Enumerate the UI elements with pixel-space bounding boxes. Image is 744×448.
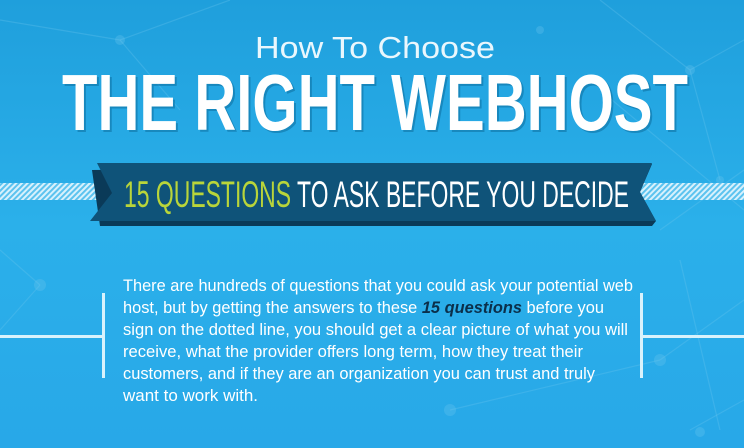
bracket lines (0, 293, 744, 378)
hatched stripes (0, 183, 744, 200)
banner ribbon (90, 163, 656, 226)
intro paragraph: want to work with. (122, 386, 258, 405)
intro paragraph: customers, and if they are an organization you can trust and truly (123, 364, 595, 383)
intro paragraph (122, 276, 633, 405)
subtitle: How To Choose: How To Choose (255, 30, 495, 65)
intro paragraph: receive, what the provider offers long term, how they treat their (123, 342, 583, 361)
intro paragraph: There are hundreds of questions that you could ask your potential web (123, 276, 633, 295)
intro paragraph: sign on the dotted line, you should get a clear picture of what you will (123, 320, 628, 339)
intro paragraph: host, but by getting the answers to these 15 questions before you (123, 298, 604, 317)
